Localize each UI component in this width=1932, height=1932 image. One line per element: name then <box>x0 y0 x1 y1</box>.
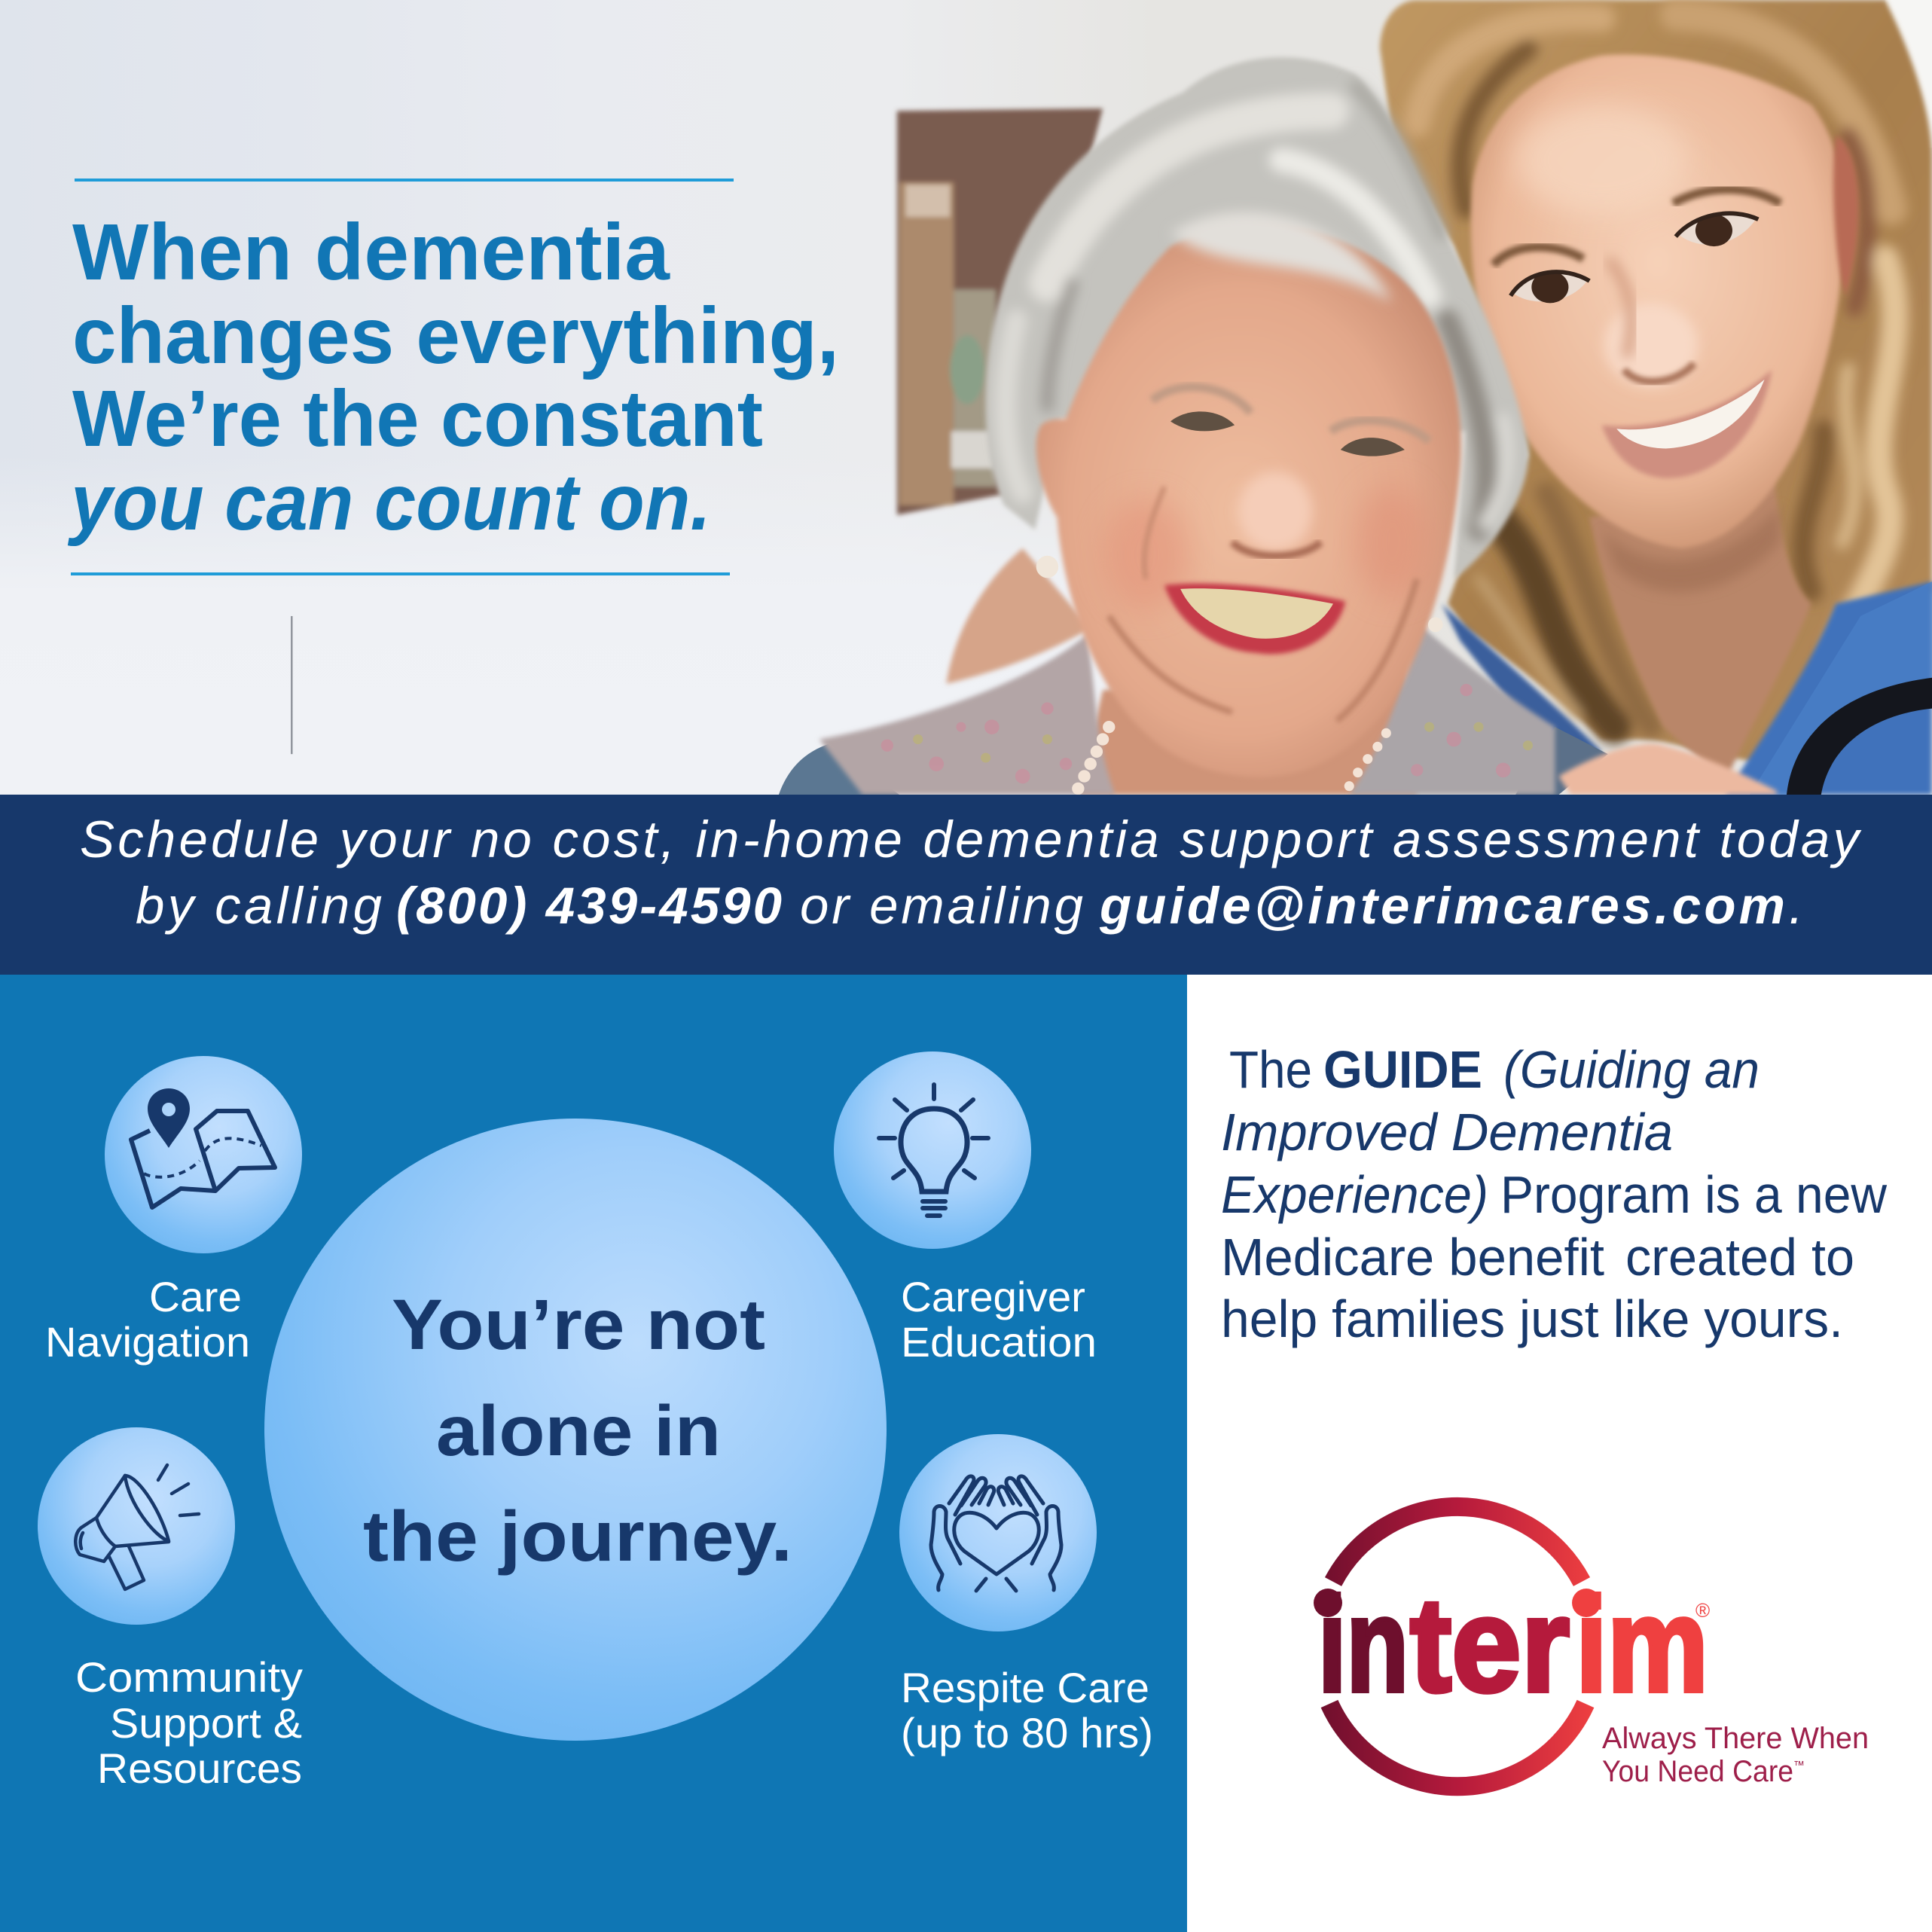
call-to-action text: guide@interimcares.com <box>1099 877 1785 935</box>
tagline: Always There When <box>1602 1722 1869 1755</box>
call-to-action text: (800) 439-4590 <box>396 877 782 935</box>
GUIDE program description: Program is a new <box>1500 1165 1887 1224</box>
label: Caregiver <box>901 1273 1085 1320</box>
panel: services <box>0 975 1187 1932</box>
GUIDE program description: The <box>1229 1040 1312 1099</box>
call-to-action band <box>0 795 1932 975</box>
central bubble: You’re not <box>392 1285 765 1365</box>
call-to-action text <box>80 810 1862 935</box>
GUIDE program description <box>1221 1040 1887 1348</box>
tagline <box>1602 1722 1869 1788</box>
wordmark: in <box>1318 1570 1409 1720</box>
central bubble: the journey. <box>363 1497 792 1576</box>
label: Navigation <box>45 1318 250 1366</box>
older woman's arm <box>946 548 1091 684</box>
pearl necklace <box>1072 721 1391 795</box>
GUIDE program description: Improved Dementia <box>1221 1103 1673 1161</box>
service: respite care <box>899 1434 1161 1757</box>
GUIDE program description: created to <box>1625 1228 1854 1286</box>
icon: megaphone <box>75 1465 199 1589</box>
earring <box>1036 556 1443 632</box>
headline: When dementia <box>72 208 670 297</box>
label: Support & <box>110 1699 302 1747</box>
GUIDE program description: (Guiding an <box>1503 1040 1760 1099</box>
label: Care <box>149 1273 242 1320</box>
logo: interim: ® <box>1695 1599 1710 1622</box>
older woman's neck <box>1078 665 1417 795</box>
wordmark <box>1318 1570 1708 1720</box>
call-to-action text: or emailing <box>800 877 1083 935</box>
headline: you can count on. <box>67 458 711 547</box>
scrubs <box>1440 603 1604 752</box>
call-to-action text: Schedule your no cost, in-home dementia support assessment today <box>80 810 1862 868</box>
headline: changes everything, <box>72 291 839 380</box>
wordmark: im <box>1576 1570 1708 1720</box>
stethoscope <box>1787 678 1932 795</box>
service: caregiver education <box>834 1051 1097 1366</box>
caregiver face <box>1471 54 1845 548</box>
icon: light bulb <box>879 1085 988 1216</box>
label: Community <box>75 1653 303 1701</box>
tagline: You Need Care <box>1602 1755 1807 1788</box>
caregiver hand <box>1558 744 1777 795</box>
label: Respite Care <box>901 1664 1149 1711</box>
central bubble: alone in <box>436 1391 721 1471</box>
logo ring <box>1329 1506 1586 1787</box>
service: community support <box>38 1427 315 1792</box>
GUIDE program description: GUIDE <box>1323 1040 1482 1099</box>
GUIDE program description: Experience) <box>1221 1165 1488 1224</box>
tagline: ™ <box>1793 1760 1805 1772</box>
caregiver hair <box>1380 0 1932 764</box>
GUIDE program description: help families just like yours. <box>1221 1290 1843 1348</box>
floral collars <box>819 634 1115 795</box>
logo: interim <box>1314 1506 1869 1788</box>
label: Resources <box>97 1744 302 1792</box>
headline rules <box>71 179 734 575</box>
call-to-action text: by calling <box>136 877 382 935</box>
icon: map with pin <box>131 1088 275 1207</box>
older woman face <box>1036 225 1461 777</box>
hero photo: older woman and caregiver <box>0 0 1932 795</box>
icon: hands holding heart <box>931 1476 1061 1591</box>
older woman hair <box>986 57 1528 579</box>
headline <box>67 208 839 547</box>
label: (up to 80 hrs) <box>901 1709 1153 1757</box>
headline: We’re the constant <box>72 374 763 463</box>
wordmark: ter <box>1410 1570 1570 1720</box>
central bubble <box>264 1119 887 1741</box>
service: care navigation <box>45 1056 302 1366</box>
caregiver neck <box>1589 481 1811 783</box>
cardigan <box>779 744 899 795</box>
GUIDE program description: Medicare benefit <box>1221 1228 1604 1286</box>
call-to-action text: . <box>1789 877 1803 935</box>
label: Education <box>901 1318 1097 1366</box>
